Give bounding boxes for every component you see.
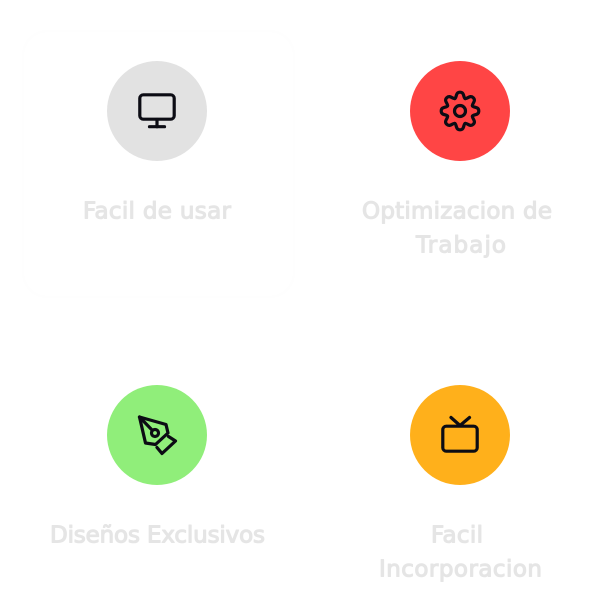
- icon: tv on orange circle: [410, 385, 510, 485]
- heading: disenos exclusivos: Diseños Exclusivos: [50, 522, 265, 548]
- heading: facil incorporacion: Facil: [431, 522, 483, 548]
- heading: facil incorporacion: [379, 522, 542, 582]
- heading: optimizacion de trabajo: Optimizacion de: [362, 198, 552, 224]
- heading: optimizacion de trabajo: Trabajo: [415, 232, 506, 258]
- heading: facil incorporacion: Incorporacion: [379, 556, 542, 582]
- panel: disenos exclusivos: [50, 385, 265, 548]
- panel: facil incorporacion: [379, 385, 542, 582]
- panel: facil de usar: [83, 61, 232, 224]
- heading: optimizacion de trabajo: [362, 198, 552, 258]
- icon: monitor on grey circle: [107, 61, 207, 161]
- panel: optimizacion de trabajo: [362, 61, 552, 258]
- heading: facil de usar: Facil de usar: [83, 198, 232, 224]
- panel: facil de usar card: [22, 30, 295, 298]
- icon: gear on red circle: [410, 61, 510, 161]
- icon: pen tool on green circle: [107, 385, 207, 485]
